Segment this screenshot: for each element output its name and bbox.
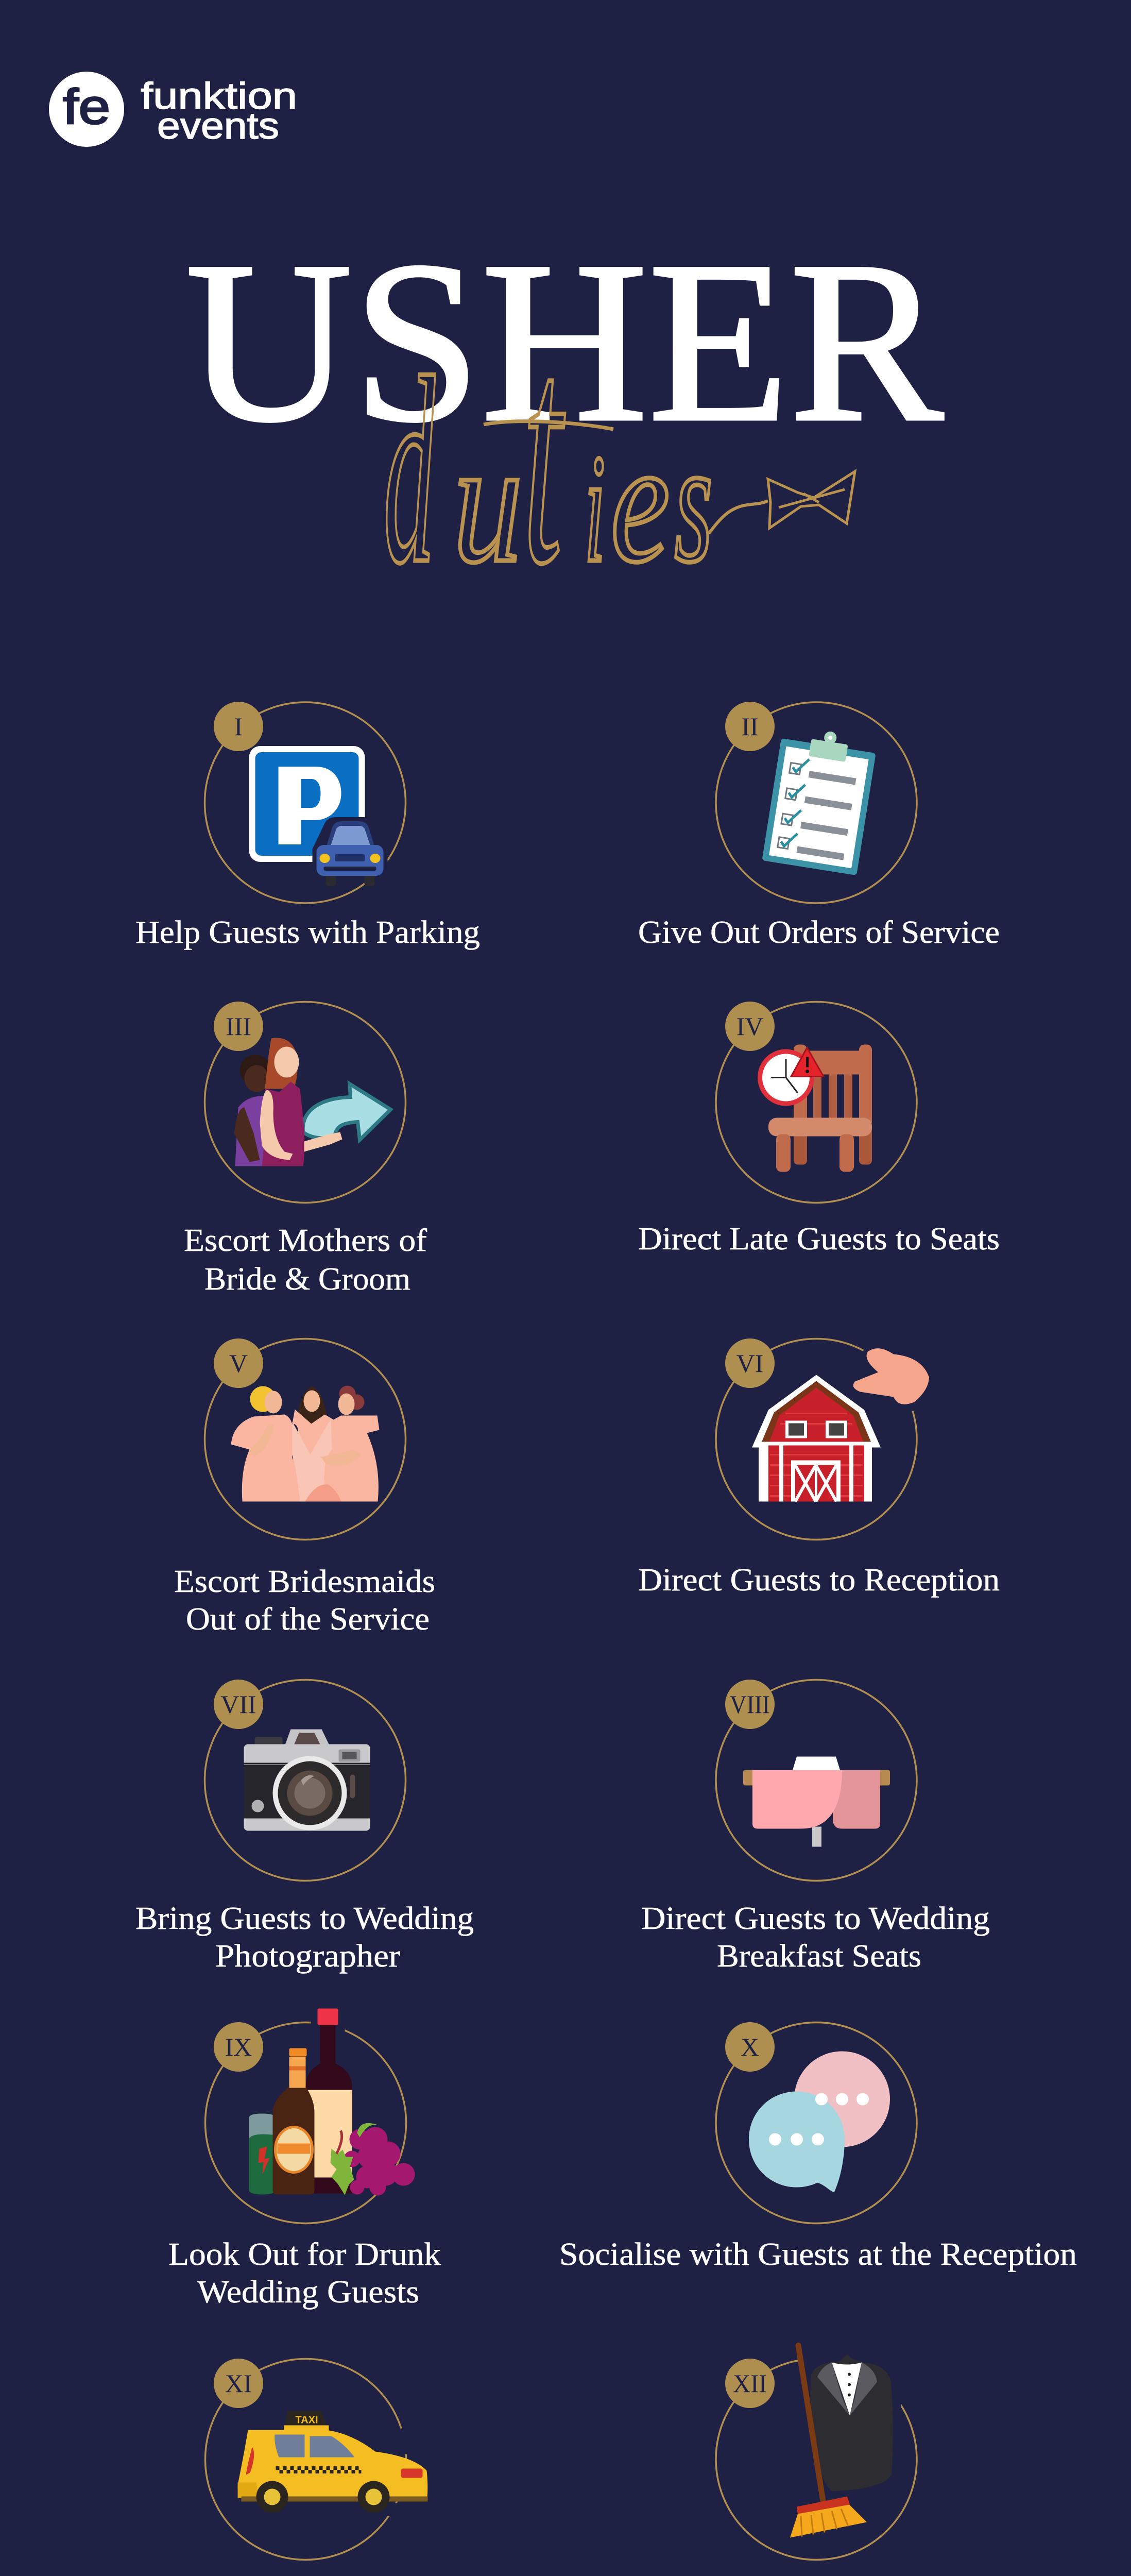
label	[184, 1223, 427, 1297]
subtitle: duties with bow tie: s	[675, 405, 713, 599]
subtitle: duties with bow tie: t	[523, 276, 567, 630]
label: Bride & Groom	[204, 1262, 410, 1297]
label: Socialise with Guests at the Reception	[559, 2237, 1077, 2272]
badge VII: VII	[220, 1690, 256, 1719]
icon: dining table	[743, 1757, 890, 1846]
icon: chair and clock	[758, 1045, 872, 1172]
logo: funktion events: fe	[63, 79, 110, 134]
badge X	[725, 2022, 775, 2072]
panel: X socialise	[559, 2022, 1077, 2272]
icon: two women and arrow	[234, 1038, 390, 1166]
label	[168, 2237, 441, 2310]
icon: camera	[244, 1729, 370, 1831]
icon: broom and tuxedo	[790, 2345, 901, 2538]
panel: IV late guests	[638, 1002, 1000, 1257]
logo: funktion events: events	[157, 106, 279, 147]
icon: yellow taxi	[237, 2411, 427, 2516]
panel: XII cleaning and suits	[608, 2345, 1030, 2576]
badge VIII: VIII	[730, 1690, 770, 1719]
icon: yellow taxi: TAXI	[295, 2414, 318, 2426]
panel: III escort mothers	[184, 1002, 427, 1297]
badge I: I	[234, 712, 243, 741]
label: Escort Bridesmaids	[174, 1564, 435, 1599]
panel: V bridesmaids	[174, 1338, 435, 1637]
badge XII	[725, 2359, 775, 2408]
label	[135, 1901, 474, 1974]
badge VI	[725, 1338, 775, 1388]
badge XI: XI	[225, 2369, 252, 2398]
badge XI	[214, 2359, 263, 2408]
label: Direct Late Guests to Seats	[638, 1222, 1000, 1257]
panel: IX drunk guests	[168, 2003, 441, 2310]
badge VIII	[725, 1680, 775, 1729]
panel: XI taxis	[91, 2359, 525, 2576]
label: Bring Guests to Wedding	[135, 1901, 474, 1936]
badge III	[214, 1002, 263, 1051]
label	[174, 1564, 435, 1637]
label: Breakfast Seats	[717, 1939, 921, 1974]
icon: bottles, can and grapes	[249, 2003, 415, 2196]
badge II: II	[741, 712, 759, 741]
panel: VIII breakfast seats	[641, 1680, 990, 1974]
badge V	[214, 1338, 263, 1388]
label: Escort Mothers of	[184, 1223, 427, 1258]
label: Direct Guests to Wedding	[641, 1901, 990, 1936]
label: Look Out for Drunk	[168, 2237, 441, 2272]
label: Photographer	[215, 1939, 400, 1974]
subtitle: duties with bow tie: d	[384, 323, 437, 619]
badge II	[725, 702, 775, 751]
icon: parking sign and car	[249, 746, 387, 886]
badge III: III	[226, 1012, 251, 1041]
label: Give Out Orders of Service	[638, 915, 1000, 950]
label	[641, 1901, 990, 1974]
badge V: V	[229, 1349, 248, 1378]
label: Wedding Guests	[197, 2275, 419, 2310]
label: Out of the Service	[186, 1602, 430, 1637]
subtitle: duties with bow tie: u	[453, 405, 523, 599]
title: USHER: USHER	[185, 214, 945, 469]
logo: funktion events: funktion	[141, 76, 297, 117]
icon: clipboard	[762, 724, 878, 875]
panel: VI reception	[638, 1338, 1000, 1598]
badge IX	[214, 2022, 263, 2072]
badge I	[214, 702, 263, 751]
panel: II orders of service	[638, 702, 1000, 950]
icon: three bridesmaids	[231, 1386, 379, 1501]
badge VI: VI	[736, 1349, 763, 1378]
subtitle: duties with bow tie: e	[611, 405, 670, 599]
panel: I parking	[135, 702, 480, 950]
badge IV	[725, 1002, 775, 1051]
icon: speech bubbles	[749, 2052, 890, 2192]
badge XII: XII	[733, 2369, 767, 2398]
badge X: X	[741, 2032, 759, 2061]
subtitle: duties with bow tie: i	[585, 423, 605, 595]
badge IV: IV	[736, 1012, 763, 1041]
label: Direct Guests to Reception	[638, 1563, 1000, 1598]
icon: pointing hand and barn	[752, 1344, 937, 1501]
badge IX: IX	[225, 2032, 252, 2061]
label: Help Guests with Parking	[135, 915, 480, 950]
logo: funktion events	[49, 72, 297, 147]
badge VII	[214, 1680, 263, 1729]
panel: VII photographer	[135, 1680, 474, 1974]
subtitle: duties with bow tie	[384, 276, 855, 630]
